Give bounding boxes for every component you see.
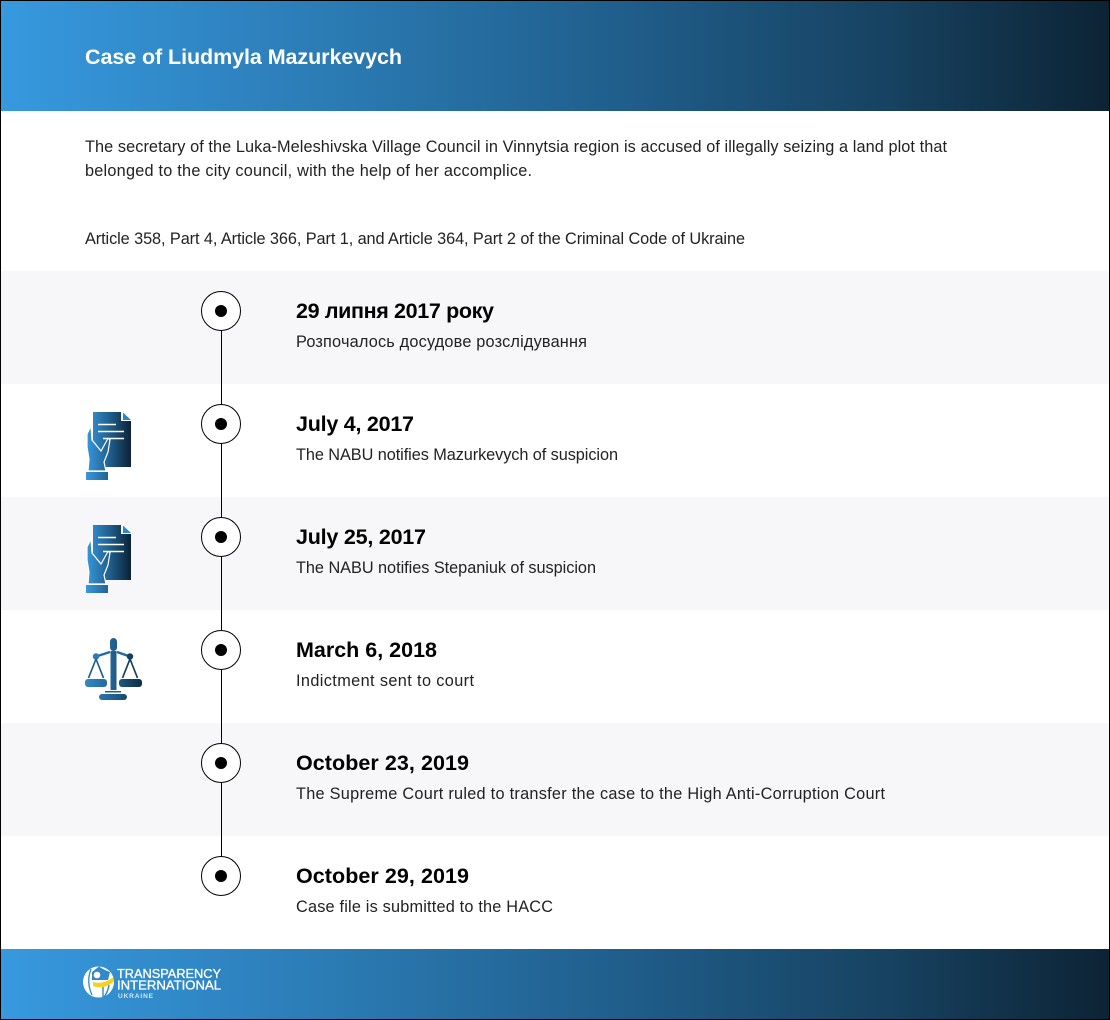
event 3 [296, 525, 596, 577]
timeline marker 4 [202, 630, 240, 670]
event 4 [296, 638, 474, 690]
icon: hand holding document [86, 412, 131, 480]
event 6 [296, 864, 553, 916]
event 4: Indictment sent to court [296, 672, 474, 690]
case description [85, 138, 947, 180]
timeline marker 3 [202, 518, 240, 556]
icon: scales of justice [85, 638, 142, 700]
logo: Transparency International Ukraine [83, 966, 222, 1000]
title: Case of Liudmyla Mazurkevych [85, 45, 402, 69]
event 2: July 4, 2017 [296, 412, 414, 436]
event 1 [296, 299, 587, 351]
event 2: The NABU notifies Mazurkevych of suspicion [296, 446, 618, 464]
timeline marker 6 [202, 856, 240, 896]
case description: belonged to the city council, with the help of her accomplice. [85, 162, 532, 180]
icon: hand holding document [86, 525, 131, 593]
timeline line [221, 311, 222, 876]
timeline marker 1 [202, 292, 240, 330]
logo: Transparency International Ukraine: INTERNATIONAL [117, 978, 221, 992]
logo: Transparency International Ukraine: TRANSPARENCY [117, 967, 222, 981]
event 5 [296, 751, 885, 803]
row 1 background [0, 271, 1110, 384]
case description: The secretary of the Luka-Meleshivska Village Council in Vinnytsia region is accused of illegally seizing a land plot that [85, 138, 947, 156]
event 1: 29 липня 2017 року [296, 299, 494, 323]
event 6: Case file is submitted to the HACC [296, 898, 553, 916]
event 1: Розпочалось досудове розслідування [296, 333, 587, 351]
header banner [0, 0, 1110, 111]
footer banner [0, 949, 1110, 1020]
event 6: October 29, 2019 [296, 864, 469, 888]
timeline marker 5 [202, 744, 240, 782]
event 2 [296, 412, 618, 464]
event 5: October 23, 2019 [296, 751, 469, 775]
logo: Transparency International Ukraine: UKRAINE [118, 993, 154, 1000]
row 3 background [0, 497, 1110, 610]
timeline marker 2 [202, 404, 240, 444]
criminal code articles: Article 358, Part 4, Article 366, Part 1, and Article 364, Part 2 of the Criminal Code of Ukraine [85, 230, 745, 248]
event 3: The NABU notifies Stepaniuk of suspicion [296, 559, 596, 577]
row 5 background [0, 723, 1110, 836]
event 4: March 6, 2018 [296, 638, 437, 662]
event 5: The Supreme Court ruled to transfer the case to the High Anti-Corruption Court [296, 785, 885, 803]
event 3: July 25, 2017 [296, 525, 426, 549]
